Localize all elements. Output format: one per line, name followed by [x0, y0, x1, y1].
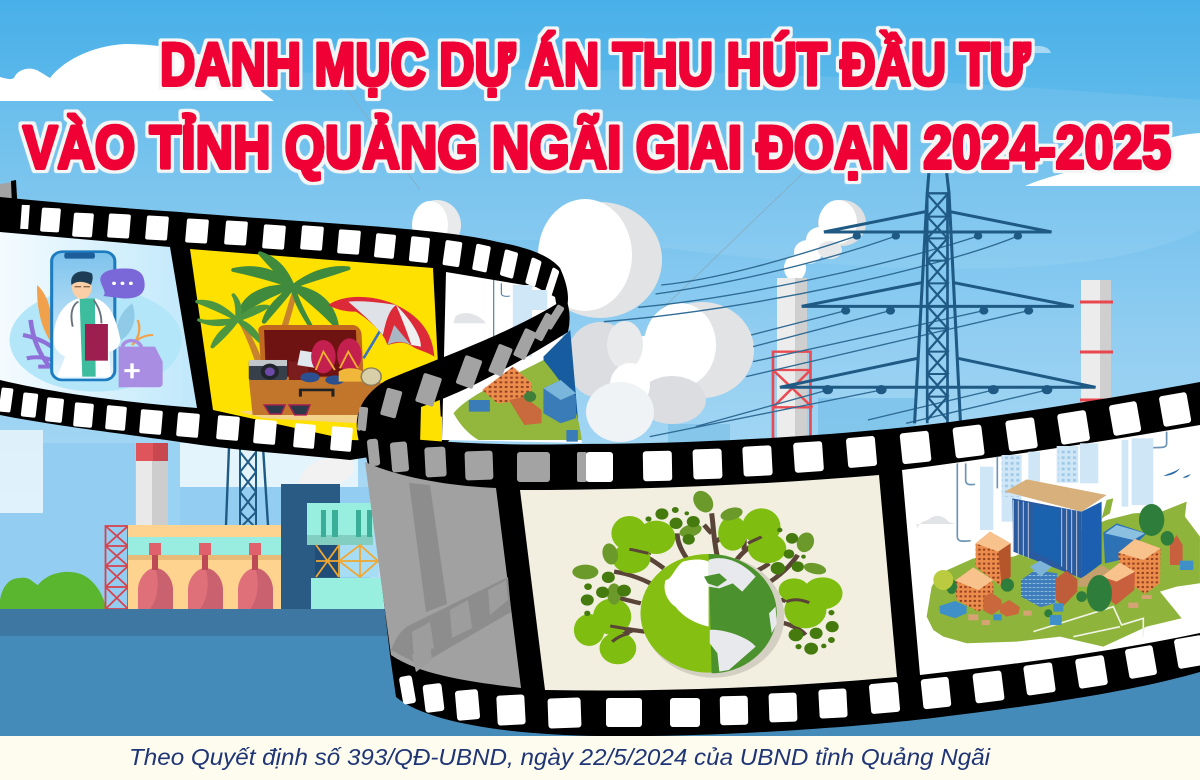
ground	[927, 502, 1200, 647]
skyline windows	[1002, 448, 1078, 497]
sprockets on return band	[357, 304, 565, 431]
orange building front	[955, 567, 993, 612]
teal building	[307, 503, 383, 610]
lower left chimney	[136, 443, 168, 527]
transmission tower	[780, 170, 1096, 423]
title line 1: DANH MỤC DỰ ÁN THU HÚT ĐẦU TƯ	[160, 31, 1030, 98]
branches over foliage	[610, 537, 809, 642]
brick tower right	[1170, 535, 1183, 565]
strip body	[360, 382, 1200, 736]
white sprockets top row	[586, 392, 1192, 482]
small blue-white cloud behind title	[960, 46, 1051, 53]
transparent film panel	[365, 462, 521, 688]
right chimney	[1080, 280, 1113, 410]
illustration: suitcase, palms and umbrella	[197, 253, 434, 423]
branches	[610, 513, 809, 642]
continents dark side	[709, 558, 777, 672]
illustration: globe with trees	[572, 488, 843, 678]
foliage	[574, 508, 843, 664]
sprockets bottom row	[0, 387, 353, 452]
illustration: city development	[917, 432, 1200, 647]
red scaffold	[773, 352, 812, 440]
frame: city background	[902, 425, 1200, 675]
source note: Theo Quyết định số 393/QĐ-UBND, ngày 22/5/2024 của UBND tỉnh Quảng Ngãi	[129, 744, 991, 770]
film stub top left	[0, 180, 19, 232]
cloud top left	[0, 44, 274, 101]
skyline	[980, 438, 1153, 530]
continents light side	[665, 560, 709, 627]
main tower	[1012, 498, 1082, 578]
background smoke clouds	[412, 199, 754, 444]
film strip upper	[0, 197, 582, 460]
small houses	[939, 561, 1193, 625]
illustration: doctor	[10, 252, 182, 392]
frame: travel	[190, 249, 442, 442]
white sprockets bottom row	[399, 635, 1200, 729]
ground strip	[0, 609, 400, 636]
title	[23, 31, 1171, 181]
dots	[581, 507, 839, 655]
small parcels	[968, 595, 1152, 625]
dark building	[281, 484, 340, 610]
blue building rear	[1103, 523, 1147, 563]
orange building left	[976, 532, 1011, 587]
sprockets top row	[20, 205, 560, 297]
red scaffold lower left	[106, 526, 128, 609]
lower left city backdrop	[0, 430, 370, 613]
water	[0, 636, 1200, 737]
globe shadow	[643, 556, 784, 678]
background: lighter sky swoosh	[0, 69, 1200, 269]
thin diagonal line	[340, 80, 803, 310]
footer band	[0, 736, 1200, 780]
blue building centre	[1021, 570, 1057, 607]
frame: doctor	[0, 232, 197, 408]
film strip lower	[360, 382, 1200, 736]
lower left tower	[226, 447, 268, 528]
globe	[640, 554, 777, 673]
left chimney	[777, 278, 807, 438]
distant pale building	[818, 398, 916, 448]
return band of film	[357, 298, 570, 445]
strip body	[0, 197, 568, 460]
factory building	[128, 525, 287, 610]
power lines	[604, 236, 1047, 437]
orange building right	[1118, 539, 1161, 594]
trees	[946, 504, 1174, 617]
frame: city partial	[442, 272, 582, 443]
brick building centre	[1056, 571, 1077, 606]
frame: environment background	[520, 475, 897, 690]
lower left smoke	[298, 457, 354, 484]
small leaves	[572, 488, 828, 605]
illustration: city fragment in third frame	[421, 280, 582, 442]
cloud top right	[1025, 133, 1200, 186]
green bush	[0, 572, 106, 609]
grey sprockets	[367, 438, 587, 482]
chimney smoke	[784, 200, 866, 281]
